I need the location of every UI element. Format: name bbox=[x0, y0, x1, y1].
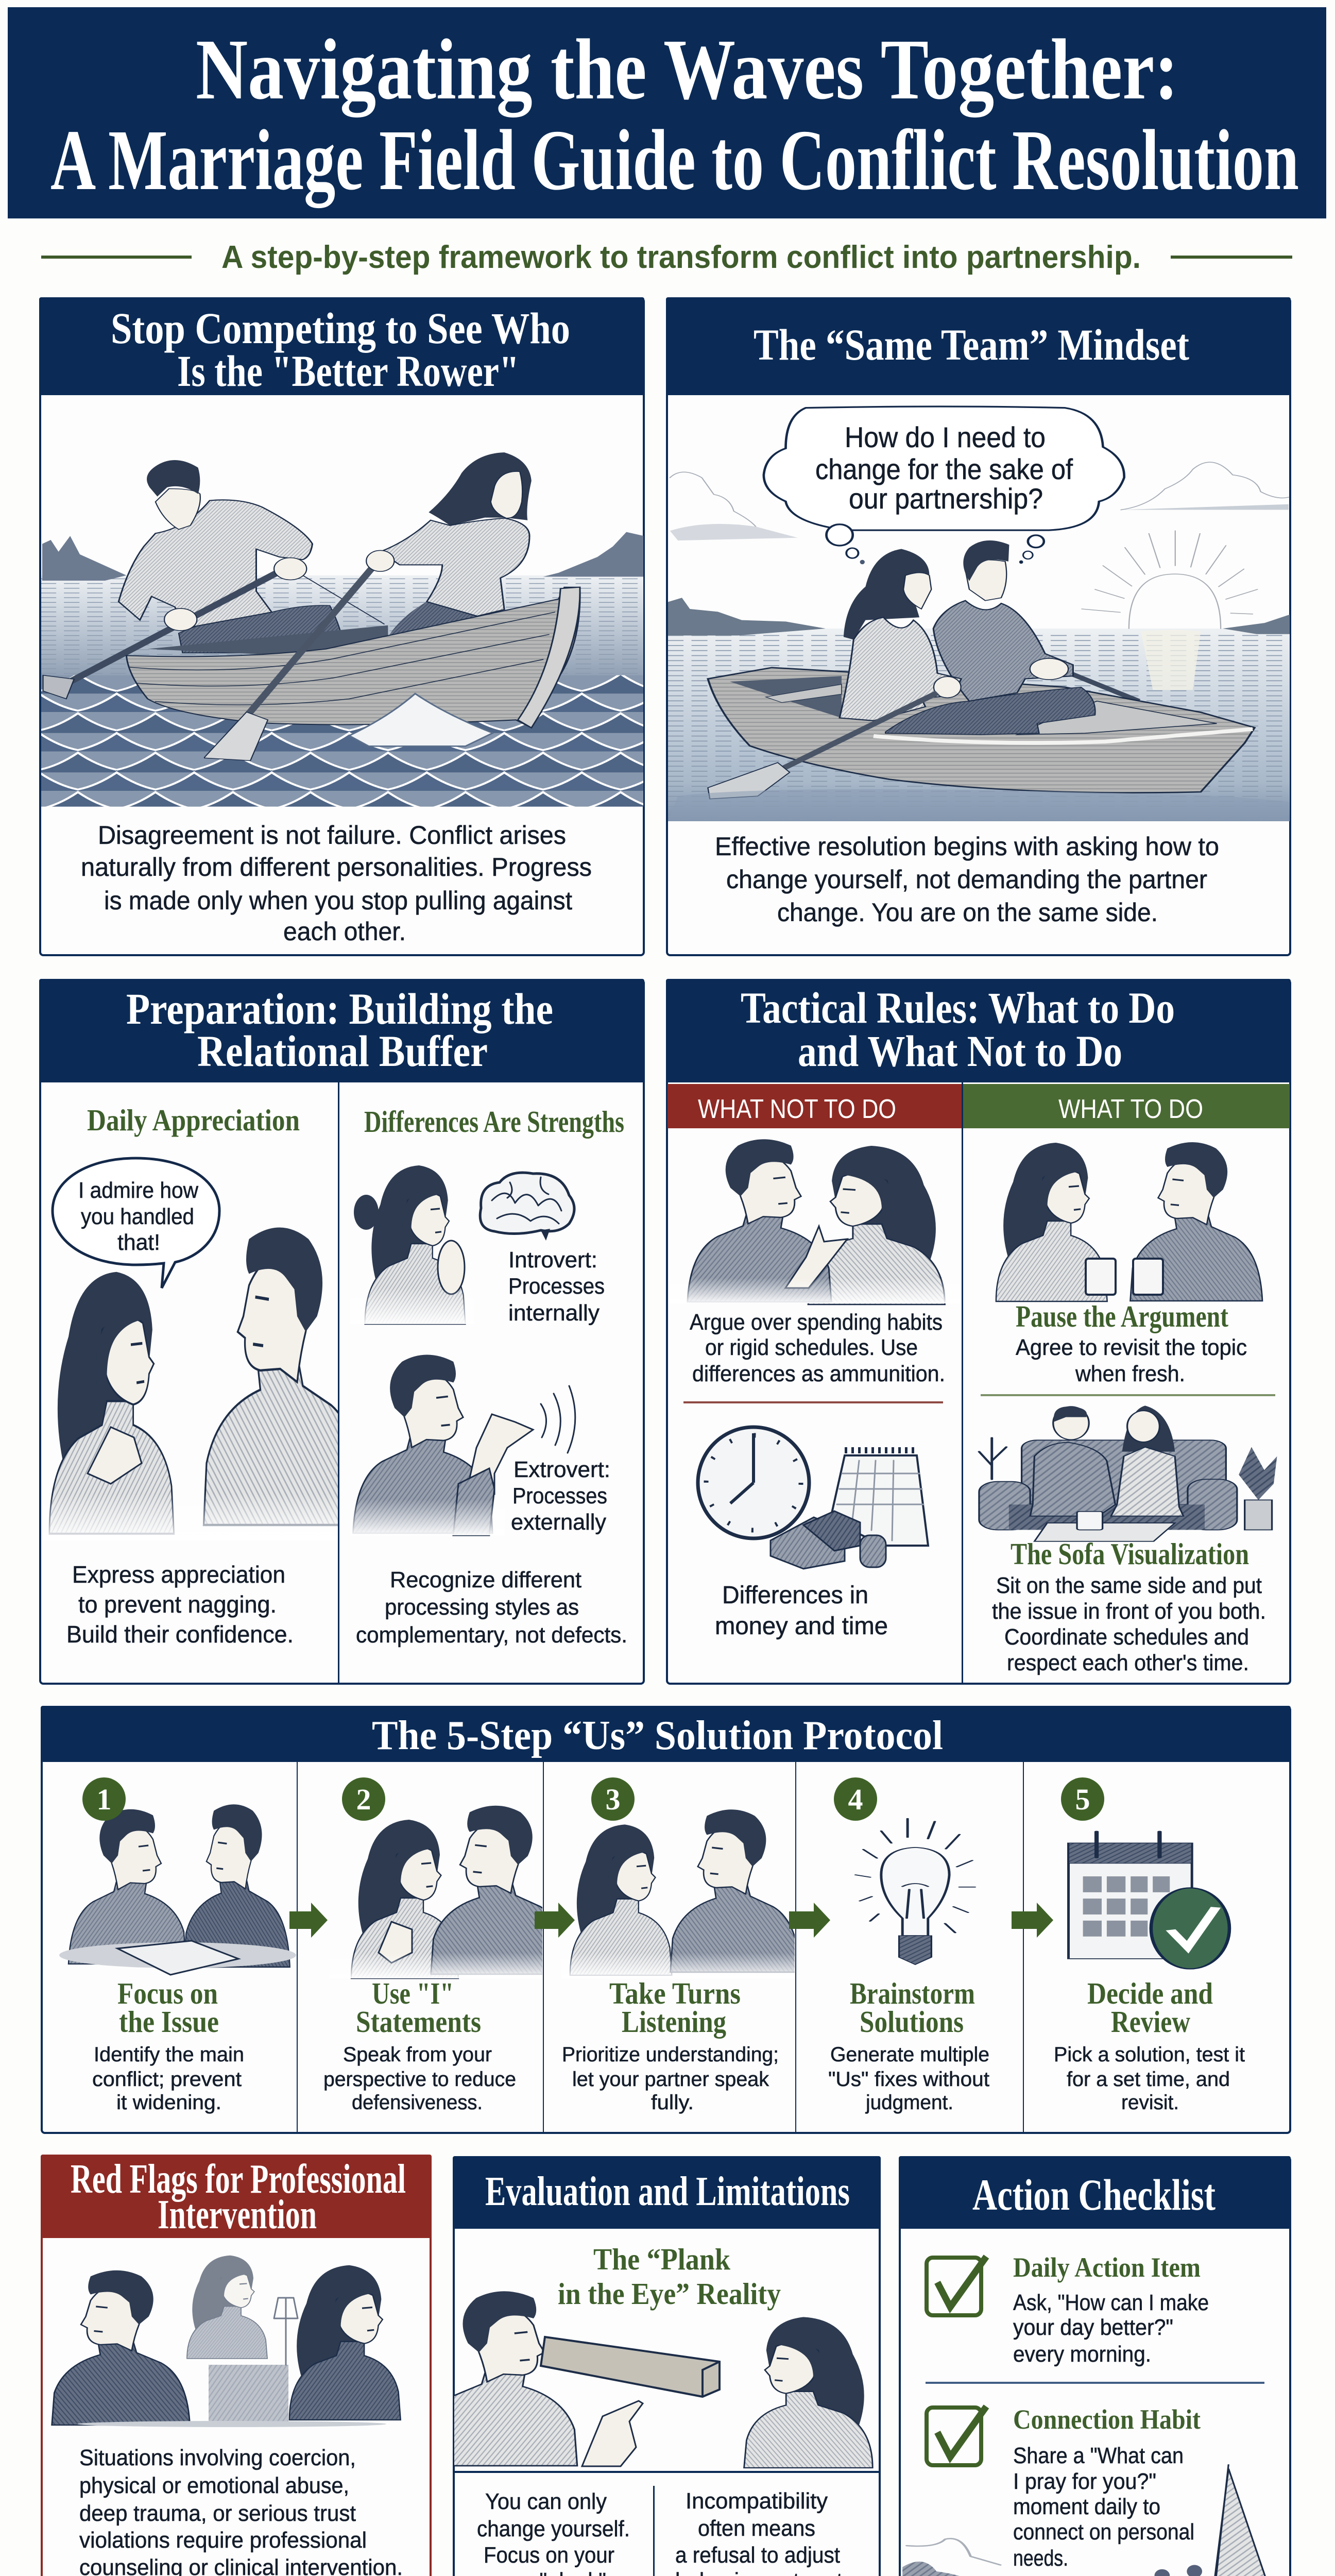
text: argue: or rigid schedules. Use bbox=[705, 1335, 918, 1360]
text: you can only change yourself bbox=[477, 2489, 630, 2576]
text: incompatibility: Incompatibility bbox=[686, 2488, 828, 2514]
subheading: plank: The “Plank bbox=[593, 2242, 730, 2276]
item: connection habit: I pray for you?" bbox=[1013, 2469, 1156, 2494]
item: connection habit: Share a "What can bbox=[1013, 2443, 1184, 2468]
icon: calendar bbox=[830, 1450, 928, 1546]
subheading: pause: Pause the Argument bbox=[1016, 1299, 1228, 1333]
badge 3: 3 bbox=[606, 1783, 620, 1816]
banner: what to do bbox=[963, 1084, 1290, 1128]
badge 2 bbox=[342, 1777, 385, 1821]
badge 5: 5 bbox=[1075, 1783, 1090, 1816]
text: incompatibility: often means bbox=[698, 2516, 815, 2541]
text: red flags bbox=[79, 2445, 403, 2576]
step 1 label: Focus on bbox=[117, 1976, 218, 2010]
panel: action checklist bbox=[899, 2156, 1291, 2576]
heading: same team: The “Same Team” Mindset bbox=[754, 320, 1189, 369]
icon: light bulb bbox=[855, 1819, 975, 1964]
illustration: couple with counselor bbox=[52, 2256, 401, 2427]
step 4 label bbox=[828, 1976, 989, 2114]
thought bubble: change for the sake of bbox=[815, 453, 1073, 485]
heading: preparation: Relational Buffer bbox=[197, 1026, 488, 1076]
text: pause bbox=[1016, 1335, 1247, 1386]
heading: red flags bbox=[71, 2157, 406, 2238]
panel: better rower bbox=[39, 297, 645, 955]
illustration: couple rowing against each other in rough water bbox=[41, 452, 645, 807]
illustration: introvert woman bbox=[350, 1165, 474, 1324]
panel: tactical rules bbox=[666, 979, 1291, 1684]
step 3 label: Listening bbox=[622, 2005, 726, 2039]
sub-panel: differences are strengths bbox=[350, 1105, 627, 1648]
illustration: couple on sofa bbox=[979, 1405, 1277, 1541]
item: daily action bbox=[1013, 2252, 1209, 2367]
heading: protocol: The 5-Step “Us” Solution Protocol bbox=[372, 1713, 943, 1758]
icon: clock bbox=[698, 1427, 809, 1538]
banner: what not to do: WHAT NOT TO DO bbox=[698, 1094, 896, 1124]
subtitle: A step-by-step framework to transform conflict into partnership. bbox=[221, 240, 1141, 275]
text: express appreciation bbox=[66, 1561, 294, 1648]
illustration: woman thanking man bbox=[41, 1227, 365, 1540]
text: sofa: respect each other's time. bbox=[1007, 1650, 1249, 1675]
step 1 bbox=[59, 1777, 296, 2114]
step 2 bbox=[323, 1777, 569, 2114]
body text: effective resolution bbox=[715, 832, 1219, 927]
step 3 bbox=[561, 1777, 800, 2114]
step 5 label: for a set time, and bbox=[1067, 2068, 1230, 2091]
step 4 label: Solutions bbox=[860, 2005, 964, 2039]
text: red flags: physical or emotional abuse, bbox=[79, 2473, 349, 2498]
body text: effective resolution: change. You are on the same side. bbox=[777, 898, 1158, 927]
step 2 label bbox=[323, 1976, 516, 2114]
illustration: couple with coffee mugs bbox=[996, 1142, 1262, 1301]
step 5 bbox=[1054, 1777, 1245, 2114]
step 2 label: Use "I" bbox=[372, 1976, 454, 2010]
step 5 label: revisit. bbox=[1121, 2091, 1179, 2114]
step 1 label: the Issue bbox=[119, 2005, 219, 2039]
speech bubble: I admire how bbox=[78, 1178, 198, 1203]
item: connection habit: moment daily to bbox=[1013, 2494, 1160, 2519]
badge 5 bbox=[1061, 1777, 1104, 1821]
badge 4 bbox=[834, 1777, 877, 1821]
icon: check box daily bbox=[927, 2257, 986, 2315]
step 2 label: Statements bbox=[356, 2005, 481, 2039]
step 5 label: Decide and bbox=[1087, 1976, 1213, 2010]
banner: what to do: WHAT TO DO bbox=[1058, 1094, 1203, 1124]
text: argue: Argue over spending habits bbox=[690, 1310, 943, 1335]
speech bubble: that! bbox=[117, 1230, 160, 1255]
text: express appreciation: to prevent nagging. bbox=[78, 1591, 277, 1618]
step 4 label: judgment. bbox=[865, 2091, 953, 2114]
heading: tactical rules bbox=[741, 983, 1175, 1076]
item: connection habit: connect on personal bbox=[1013, 2519, 1194, 2545]
illustration: extrovert man bbox=[350, 1355, 575, 1535]
body text: disagreement: each other. bbox=[283, 917, 406, 946]
badge 1 bbox=[82, 1777, 126, 1821]
body text: effective resolution: Effective resolution begins with asking how to bbox=[715, 832, 1219, 861]
illustration: couple rowing together at sunrise bbox=[668, 462, 1290, 821]
item: daily action: Ask, "How can I make bbox=[1013, 2290, 1209, 2315]
text: incompatibility bbox=[675, 2488, 843, 2576]
icon: check box connection bbox=[927, 2406, 986, 2465]
step 5 label: Pick a solution, test it bbox=[1054, 2043, 1245, 2066]
text: recognize bbox=[356, 1567, 627, 1648]
arrow: step 2 to 3 bbox=[535, 1903, 575, 1938]
item: connection habit: Connection Habit bbox=[1013, 2404, 1201, 2435]
text: sofa: the issue in front of you both. bbox=[992, 1599, 1266, 1624]
banner: what not to do bbox=[668, 1084, 962, 1128]
label: introvert: Introvert: bbox=[508, 1247, 597, 1273]
arrow: step 1 to 2 bbox=[289, 1903, 328, 1938]
step 3 label bbox=[562, 1976, 779, 2114]
icon: brain bbox=[480, 1173, 574, 1241]
step 4 bbox=[828, 1777, 989, 2114]
label: extrovert: Extrovert: bbox=[514, 1457, 610, 1482]
heading: action checklist: Action Checklist bbox=[972, 2170, 1216, 2219]
text: you can only change yourself: change yourself. bbox=[477, 2516, 630, 2541]
panel: same team bbox=[666, 297, 1291, 955]
step 5 label bbox=[1054, 1976, 1245, 2114]
badge 2: 2 bbox=[356, 1783, 371, 1816]
step 1 label: conflict; prevent bbox=[92, 2068, 242, 2091]
item: daily action: Daily Action Item bbox=[1013, 2252, 1201, 2283]
text: argue: differences as ammunition. bbox=[692, 1361, 945, 1386]
illustration: sailboat scene bbox=[901, 2464, 1289, 2576]
step 2 label: Speak from your bbox=[343, 2043, 492, 2066]
text: recognize: complementary, not defects. bbox=[356, 1622, 627, 1648]
step 3 label: let your partner speak bbox=[572, 2068, 769, 2091]
text: recognize: Recognize different bbox=[390, 1567, 581, 1592]
text: you can only change yourself: Focus on your bbox=[484, 2543, 614, 2568]
sub-panel: daily appreciation bbox=[41, 1103, 365, 1648]
step 4 label: Generate multiple bbox=[830, 2043, 989, 2066]
text: express appreciation: Build their confidence. bbox=[66, 1621, 294, 1648]
text: express appreciation: Express appreciation bbox=[72, 1561, 285, 1588]
thought bubble: How do I need to bbox=[845, 421, 1046, 453]
illustration: plank in the eye bbox=[422, 2291, 872, 2468]
thought bubble bbox=[764, 406, 1124, 564]
illustration: couple arguing bbox=[668, 1139, 961, 1304]
label: introvert: Processes bbox=[508, 1274, 605, 1299]
speech bubble: you handled bbox=[81, 1204, 194, 1229]
body text: disagreement: naturally from different personalities. Progress bbox=[81, 853, 592, 882]
icon: money stacks bbox=[771, 1511, 886, 1569]
thought bubble: our partnership? bbox=[849, 482, 1043, 515]
subheading: plank: in the Eye” Reality bbox=[558, 2277, 781, 2311]
body text: effective resolution: change yourself, not demanding the partner bbox=[726, 865, 1207, 894]
subheading: differences: Differences Are Strengths bbox=[364, 1105, 624, 1139]
subheading: daily appreciation: Daily Appreciation bbox=[87, 1103, 300, 1137]
heading: red flags: Intervention bbox=[158, 2192, 317, 2238]
text: sofa: Sit on the same side and put bbox=[996, 1573, 1262, 1598]
text: sofa: Coordinate schedules and bbox=[1004, 1624, 1249, 1650]
badge 4: 4 bbox=[848, 1783, 863, 1816]
label: extrovert: Processes bbox=[512, 1483, 607, 1509]
label: extrovert: externally bbox=[511, 1510, 606, 1535]
panel: 5-step protocol bbox=[41, 1706, 1291, 2133]
column: what not to do bbox=[668, 1084, 962, 1640]
text: recognize: processing styles as bbox=[385, 1595, 579, 1620]
body text: disagreement: Disagreement is not failure. Conflict arises bbox=[98, 821, 566, 850]
title banner bbox=[8, 7, 1326, 218]
step 2 label: defensiveness. bbox=[352, 2091, 483, 2114]
text: you can only change yourself: You can only bbox=[485, 2489, 607, 2514]
heading: tactical rules: Tactical Rules: What to Do bbox=[741, 983, 1175, 1032]
step 1 label bbox=[92, 1976, 244, 2114]
text: money and time: Differences in bbox=[722, 1582, 868, 1609]
arrow: step 4 to 5 bbox=[1012, 1903, 1053, 1938]
label: extrovert bbox=[511, 1457, 610, 1535]
panel: red flags bbox=[41, 2155, 432, 2576]
illustration: couple writing bbox=[59, 1804, 296, 1975]
text: red flags: deep trauma, or serious trust bbox=[79, 2501, 356, 2526]
heading: red flags: Red Flags for Professional bbox=[71, 2157, 406, 2202]
heading: tactical rules: and What Not to Do bbox=[798, 1026, 1122, 1076]
text: money and time bbox=[715, 1582, 888, 1640]
text: red flags: violations require professional bbox=[79, 2528, 367, 2553]
step 4 label: Brainstorm bbox=[850, 1976, 975, 2010]
illustration: couple taking turns listening bbox=[561, 1809, 800, 1978]
body text: disagreement: is made only when you stop pulling against bbox=[104, 886, 572, 915]
text: pause: Agree to revisit the topic bbox=[1016, 1335, 1247, 1360]
speech bubble bbox=[53, 1158, 219, 1288]
step 1 label: it widening. bbox=[116, 2091, 221, 2114]
item: connection habit bbox=[1013, 2404, 1201, 2571]
label: introvert bbox=[508, 1247, 605, 1326]
panel: preparation bbox=[39, 979, 644, 1684]
text: argue bbox=[690, 1310, 945, 1386]
heading: better rower: Is the "Better Rower" bbox=[177, 346, 519, 396]
panel: evaluation and limitations bbox=[422, 2156, 881, 2576]
step 1 label: Identify the main bbox=[94, 2043, 244, 2066]
subheading: sofa visualization: The Sofa Visualization bbox=[1011, 1537, 1249, 1571]
arrow: step 3 to 4 bbox=[789, 1903, 830, 1938]
heading: better rower: Stop Competing to See Who bbox=[111, 303, 570, 353]
badge 1: 1 bbox=[97, 1783, 111, 1816]
text: pause: when fresh. bbox=[1075, 1361, 1185, 1386]
body text: disagreement bbox=[81, 821, 592, 946]
step 4 label: "Us" fixes without bbox=[828, 2068, 989, 2091]
icon: calendar with check bbox=[1069, 1832, 1229, 1969]
text: red flags: Situations involving coercion, bbox=[79, 2445, 356, 2470]
badge 3 bbox=[591, 1777, 635, 1821]
heading: better rower bbox=[111, 303, 570, 396]
item: daily action: your day better?" bbox=[1013, 2315, 1173, 2340]
text: incompatibility: a refusal to adjust bbox=[675, 2543, 840, 2568]
item: daily action: every morning. bbox=[1013, 2342, 1151, 2367]
text: sofa bbox=[992, 1573, 1266, 1675]
step 3 label: Take Turns bbox=[609, 1976, 741, 2010]
subheading: plank bbox=[558, 2242, 781, 2311]
step 2 label: perspective to reduce bbox=[323, 2068, 516, 2091]
column: what to do bbox=[963, 1084, 1290, 1675]
step 5 label: Review bbox=[1111, 2005, 1190, 2039]
step 3 label: Prioritize understanding; bbox=[562, 2043, 779, 2066]
heading: preparation: Preparation: Building the bbox=[126, 984, 553, 1033]
label: introvert: internally bbox=[508, 1300, 600, 1326]
step 3 label: fully. bbox=[651, 2091, 694, 2114]
heading: evaluation: Evaluation and Limitations bbox=[485, 2169, 850, 2214]
illustration: woman using I statements bbox=[330, 1806, 569, 1978]
text: money and time: money and time bbox=[715, 1613, 888, 1640]
item: connection habit: needs. bbox=[1013, 2546, 1068, 2571]
heading: preparation bbox=[126, 984, 553, 1076]
